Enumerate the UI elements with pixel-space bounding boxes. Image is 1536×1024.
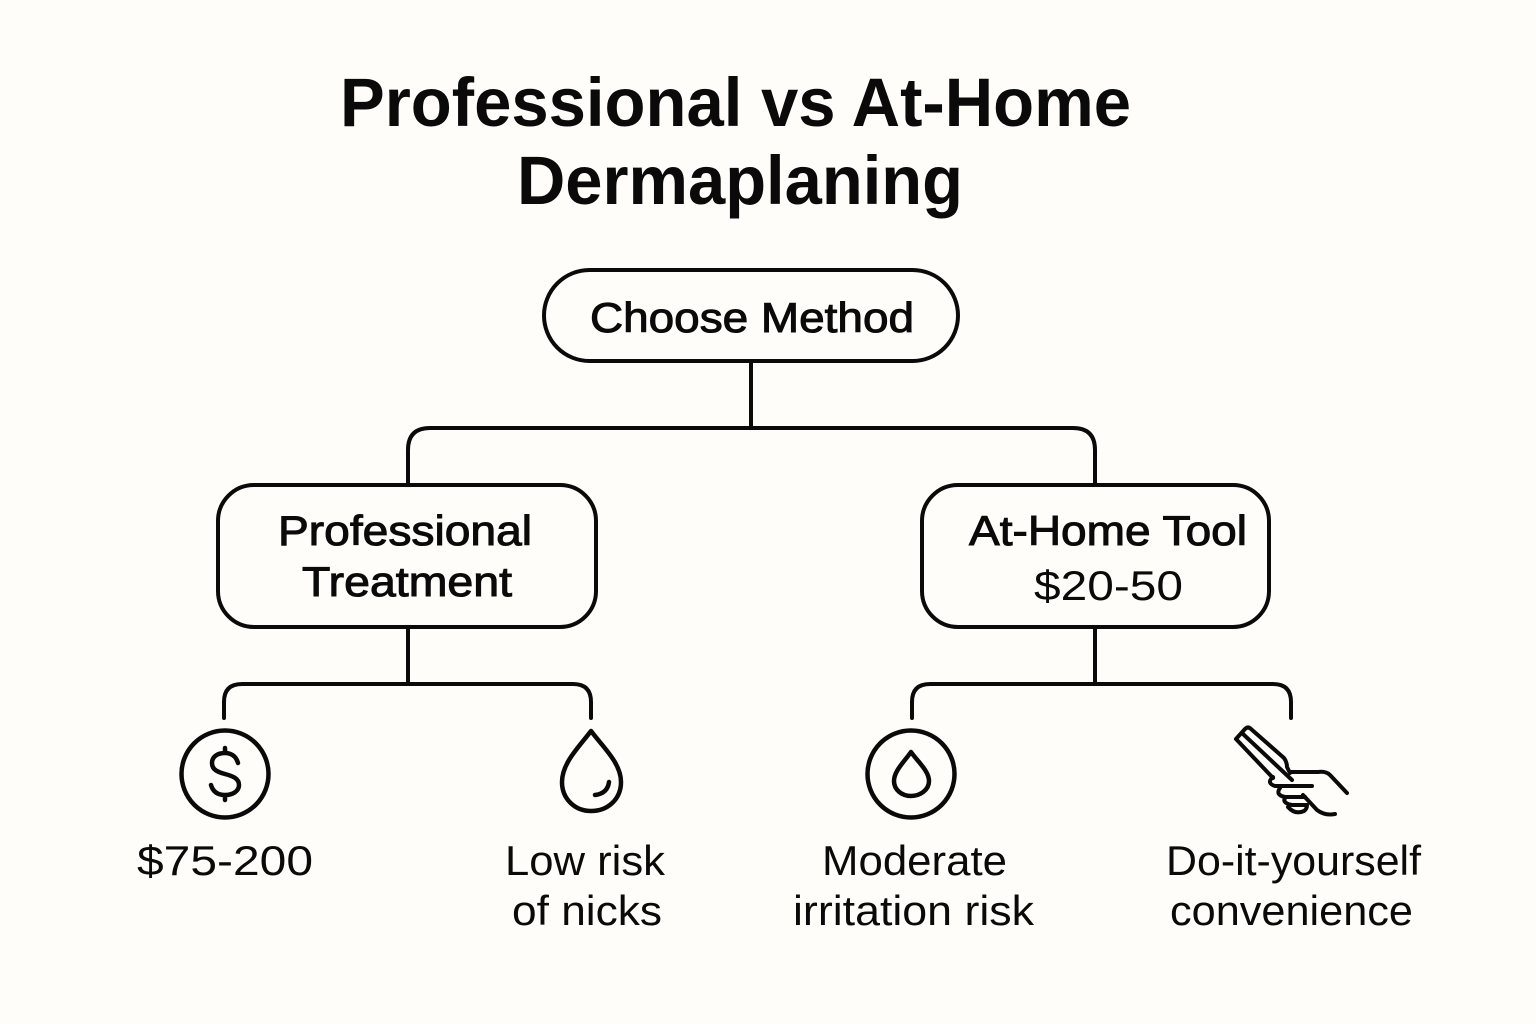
title: Professional vs At-Home — [340, 64, 1131, 141]
title — [340, 64, 1131, 219]
label: do-it-yourself — [1166, 837, 1421, 934]
node: professional treatment: Professional — [278, 507, 532, 554]
node: at-home tool: At-Home Tool — [969, 507, 1247, 554]
icon: hand holding dermaplaning tool — [1236, 728, 1347, 814]
connector: at-home to outcomes — [912, 627, 1291, 718]
node: professional treatment — [218, 485, 596, 627]
label: do-it-yourself: Do-it-yourself — [1166, 837, 1421, 884]
label: moderate irritation — [793, 837, 1035, 934]
node: at-home tool — [922, 485, 1269, 627]
icon: dollar coin — [182, 730, 268, 818]
connector: choose method to branches — [408, 361, 1095, 485]
label: low risk — [505, 837, 666, 934]
label: low risk: Low risk — [505, 837, 666, 884]
label: do-it-yourself: convenience — [1170, 887, 1413, 934]
label: low risk: of nicks — [512, 887, 662, 934]
node: professional treatment: Treatment — [302, 558, 512, 605]
label: moderate irritation: Moderate — [822, 837, 1007, 884]
icon: drop in circle — [868, 730, 954, 818]
icon: water drop with highlight — [562, 731, 621, 811]
label: price: $75-200 — [137, 837, 313, 884]
node: choose method — [544, 270, 958, 361]
title: Dermaplaning — [517, 142, 963, 219]
node: choose method: Choose Method — [590, 294, 914, 341]
connector: professional to outcomes — [224, 627, 591, 718]
node: at-home tool: $20-50 — [1034, 562, 1183, 609]
label: moderate irritation: irritation risk — [793, 887, 1035, 934]
